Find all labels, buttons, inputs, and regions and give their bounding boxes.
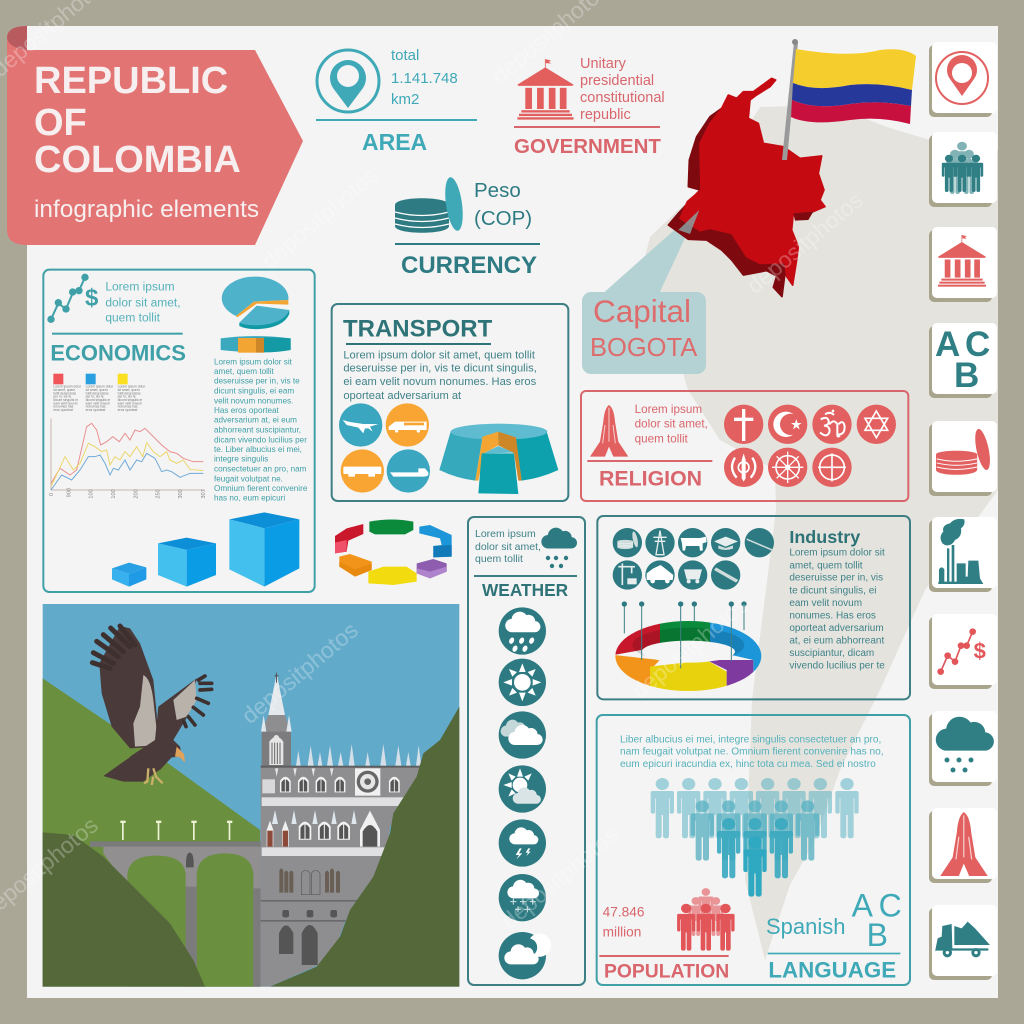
religion intro text: dolor sit amet, [635, 418, 708, 431]
economics paragraph: dicunt singulis, ei eam [214, 387, 294, 396]
icon: khanda [724, 448, 763, 487]
icon: crane [613, 560, 642, 590]
watermarks [0, 0, 868, 934]
population text: Liber albucius ei mei, integre singulis consectetuer an pro, [620, 735, 881, 746]
heading: Republic of Colombia: REPUBLIC [34, 60, 228, 102]
capital text: Capital [593, 293, 691, 329]
industry text: deseruisse per in, vis [789, 573, 883, 584]
chart legend: sit amet, quem [118, 388, 140, 392]
chart legend: nonumes has [86, 405, 106, 409]
chart legend: Lorem ipsum dolor [86, 385, 114, 389]
panel: capital landmark illustration [43, 604, 459, 987]
icon: cross [724, 405, 763, 444]
economics paragraph: has no, eum epicuri [214, 494, 285, 503]
ring chart in pieces [335, 519, 452, 585]
icon: graduation cap [711, 528, 740, 557]
icon: star of David [857, 405, 896, 444]
chart legend: eam velit novum [53, 401, 78, 405]
line chart: 0 [49, 493, 55, 496]
population label: POPULATION [604, 962, 729, 983]
transport text: oporteat adversarium at [343, 390, 462, 402]
chart legend: eam velit novum [118, 401, 142, 405]
icon: red people [677, 888, 735, 951]
bar of segments [221, 336, 291, 353]
banner ribbon curl [7, 26, 27, 50]
block: area [316, 47, 477, 155]
economics paragraph: deseruisse per in, vis te [214, 377, 300, 386]
chart legend [53, 374, 146, 412]
economics paragraph: integre singulis [214, 455, 268, 464]
chart legend: dicunt singulis ei [86, 398, 110, 402]
icon: ABC letters: A [852, 888, 874, 924]
icon: rain cloud [541, 528, 577, 568]
chart legend: tollit deseruisse [118, 391, 141, 395]
flag of Colombia [782, 39, 916, 160]
religion intro text: quem tollit [635, 432, 689, 445]
economics paragraph: velit novum nonumes. [214, 396, 293, 405]
icon: rain [499, 607, 546, 655]
upper windows [262, 768, 400, 796]
industry text: te dicunt singulis, ei [789, 585, 876, 596]
chart legend: per in, vis te [118, 395, 136, 399]
background map silhouette [640, 105, 998, 960]
economics paragraph: Lorem ipsum dolor sit [214, 357, 293, 366]
chart legend: per in, vis te [86, 395, 104, 399]
flag cloth [793, 49, 916, 90]
icon: syringe [711, 560, 740, 590]
banner shape [7, 26, 303, 245]
church [261, 673, 421, 987]
panel: weather [468, 517, 585, 985]
chart legend: eros oporteat [86, 408, 105, 412]
capital text: BOGOTA [590, 334, 697, 362]
icon: dharma wheel [768, 448, 807, 487]
flag pole [782, 42, 798, 160]
panel: industry [597, 516, 910, 699]
area value: km2 [391, 91, 419, 108]
3D cylinder chart [439, 424, 558, 494]
industry text: nonumes. Has eros [789, 610, 876, 621]
watermarks: depositphotos [627, 592, 753, 704]
bridge [90, 821, 262, 987]
economics intro text: quem tollit [105, 311, 161, 325]
weather intro text: quem tollit [475, 553, 523, 565]
icon: sun and cloud [499, 765, 546, 813]
weather intro text: dolor sit amet, [475, 541, 541, 553]
lower windows [261, 868, 361, 965]
industry text: Lorem ipsum dolor sit [789, 548, 885, 559]
population value: million [603, 925, 641, 940]
icon: crescent and star [768, 405, 807, 444]
currency name: (COP) [474, 207, 532, 230]
transport text: ei eam velit novum nonumes. Has eros [343, 376, 537, 388]
3D cubes [112, 512, 299, 587]
icon: om [812, 405, 852, 444]
pinnacles [296, 744, 421, 766]
industry text: amet, quem tollit [789, 560, 863, 571]
chart legend: sit amet, quem [86, 388, 108, 392]
weather heading: WEATHER [482, 580, 569, 600]
sidebar tile: industry [929, 517, 997, 592]
line chart: 200 [133, 489, 139, 499]
economics paragraph: amet, quem tollit [214, 367, 275, 376]
watermarks: depositphotos [742, 187, 868, 299]
icon: dump truck [645, 560, 675, 590]
subheading: infographic elements [34, 196, 259, 223]
area value: 1.141.748 [391, 70, 458, 87]
panel: economics [43, 270, 315, 592]
chart legend: Lorem ipsum dolor [53, 385, 82, 389]
icon: growth and dollar [47, 274, 98, 323]
chart legend: tollit deseruisse [53, 391, 76, 395]
sidebar tile: location [929, 42, 997, 117]
panel: transport [332, 304, 568, 501]
icon: pylon [645, 528, 675, 557]
sidebar tile: language: C [965, 325, 990, 364]
weather intro text: Lorem ipsum [475, 528, 536, 540]
chart legend: tollit deseruisse [86, 391, 109, 395]
economics intro text: dolor sit amet, [105, 295, 181, 309]
government text: presidential [580, 73, 654, 89]
pie chart [222, 277, 289, 329]
watermarks: depositphotos [257, 162, 383, 274]
industry icons [613, 528, 774, 590]
language label: LANGUAGE [768, 958, 896, 983]
people pictogram [651, 778, 859, 897]
sidebar tile: language: B [954, 356, 979, 395]
icon: rifle [745, 528, 774, 557]
middle windows [267, 810, 380, 847]
chart legend: eros oporteat [118, 408, 137, 412]
title banner [7, 26, 303, 245]
economics paragraph: consectetuer an pro, nam [214, 465, 307, 474]
map of Colombia [668, 78, 825, 297]
population text: nam feugait volutpat ne. Omnium fierent convenire has no, [620, 747, 884, 758]
icon: ABC letters: B [867, 917, 888, 953]
population text: eum epicuri iracundia ex, hinc tota cu mea. Sed ei nostro [620, 759, 876, 770]
transport heading: TRANSPORT [343, 316, 493, 343]
dark hill left [43, 832, 205, 987]
chart legend: eros oporteat [53, 408, 73, 412]
icon: coins [395, 176, 466, 233]
sidebar tile: currency [929, 421, 997, 496]
industry text: oporteat adversarium [789, 623, 884, 634]
line chart: 100 [89, 489, 95, 499]
sidebar icons [929, 42, 997, 980]
capital callout pointer [600, 208, 699, 296]
government text: constitutional [580, 90, 665, 106]
economics paragraph: Has eros oporteat [214, 406, 280, 415]
icon: ship [387, 449, 430, 493]
icon: train [341, 449, 384, 493]
chart legend: nonumes has [118, 405, 138, 409]
population value: 47.846 [603, 905, 644, 920]
economics paragraph: adversarium at, ei eum [214, 416, 297, 425]
line chart: 100 [111, 489, 117, 499]
chart legend: per in, vis te [53, 395, 71, 399]
panel: religion [581, 391, 908, 501]
line chart [49, 418, 207, 499]
sidebar tile: people [929, 132, 997, 207]
condor [92, 626, 212, 785]
chart legend: sit amet, quem [53, 388, 75, 392]
icon: thunderstorm [499, 819, 546, 867]
ring chart with pins [613, 601, 767, 697]
line chart: 900 [67, 488, 73, 497]
bridge lamps [120, 821, 232, 840]
heading: Republic of Colombia: OF [34, 102, 87, 144]
economics intro text: Lorem ipsum [105, 280, 175, 294]
religion heading: RELIGION [599, 466, 702, 490]
chart legend: nonumes has [53, 405, 74, 409]
economics heading: ECONOMICS [50, 341, 186, 366]
transport text: deseruisse per in, vis te dicunt singulis, [343, 363, 537, 375]
sidebar tile: weather [929, 711, 997, 786]
dark hill right [270, 707, 459, 987]
area value: total [391, 47, 419, 64]
government text: Unitary [580, 56, 627, 72]
economics paragraph: abhorreant suscipiantur, [214, 426, 301, 435]
economics paragraph: dicam vivendo lucilius per [214, 435, 307, 444]
icon: mining cart [678, 560, 707, 590]
sidebar tile: language: A [935, 325, 960, 364]
chart legend: dicunt singulis ei [118, 398, 142, 402]
green hill [43, 678, 260, 987]
line chart: 250 [156, 489, 162, 499]
block: currency [395, 176, 540, 279]
line chart: 300 [178, 489, 184, 499]
industry text: vivendo lucilius per te [789, 661, 885, 672]
chart legend: Lorem ipsum dolor [118, 385, 146, 389]
icon: sun cross [812, 448, 852, 487]
icon: praying hands [590, 405, 628, 457]
sky [43, 604, 459, 987]
sidebar tile: economy: $ [974, 639, 986, 664]
government label: GOVERNMENT [514, 135, 661, 158]
icon: sun [499, 659, 546, 706]
icon: location pin [317, 50, 379, 112]
sidebar tile: religion [929, 808, 997, 883]
area label: AREA [362, 129, 427, 155]
industry text: suscipiantur, dicam [789, 648, 874, 659]
currency label: CURRENCY [401, 252, 537, 279]
icon: ABC letters: C [879, 888, 902, 924]
chart legend: eam velit novum [86, 401, 110, 405]
icon: cloud [499, 711, 546, 759]
watermarks: depositphotos [237, 617, 363, 729]
economics paragraph: Omnium fierent convenire [214, 484, 308, 493]
icon: coins [613, 528, 642, 557]
line chart: 307 [201, 489, 207, 499]
economics paragraph: te. Liber albucius ei mei, [214, 445, 302, 454]
balustrades [262, 797, 409, 806]
icon: bus [386, 403, 429, 447]
currency name: Peso [474, 179, 521, 202]
sidebar tile: transport [929, 905, 997, 980]
religion intro text: Lorem ipsum [635, 403, 702, 416]
capital callout [582, 292, 706, 374]
industry text: eam velit novum [789, 598, 862, 609]
icon: moon and cloud [499, 932, 551, 979]
icon: cow [678, 528, 707, 557]
watermarks: depositphotos [497, 822, 623, 934]
icon: growth and dollar: $ [85, 284, 98, 311]
economics paragraph: feugait volutpat ne. [214, 474, 283, 483]
weather icon column [499, 607, 551, 979]
chart legend: dicunt singulis ei [53, 398, 78, 402]
transport text: Lorem ipsum dolor sit amet, quem tollit [343, 349, 536, 361]
sidebar tile: government [929, 227, 997, 302]
icon: snow [499, 874, 546, 921]
sidebar tile: economy [929, 614, 997, 689]
block: government [514, 56, 665, 158]
industry heading: Industry [789, 527, 860, 547]
industry text: at, ei eum abhorreant [789, 636, 884, 647]
panel: population and language [597, 715, 910, 985]
government text: republic [580, 107, 631, 123]
icon: temple [517, 59, 574, 120]
sidebar tile: language [929, 323, 997, 398]
language name: Spanish [766, 914, 845, 939]
heading: Republic of Colombia: COLOMBIA [34, 139, 241, 181]
icon: airplane [339, 403, 382, 447]
